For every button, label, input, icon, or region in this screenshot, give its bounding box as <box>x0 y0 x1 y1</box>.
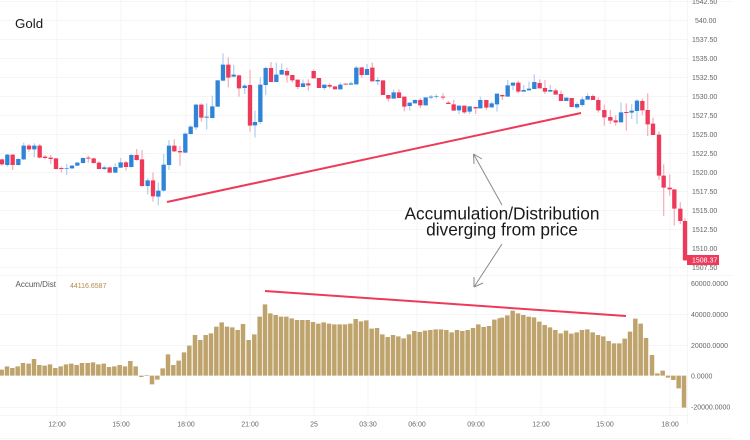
price axis labels: 1510.00 <box>692 246 717 253</box>
price axis labels: 540.00 <box>695 18 717 25</box>
indicator axis labels: 60000.0000 <box>691 281 728 288</box>
annotation text <box>405 204 599 240</box>
arrow: to indicator trend <box>474 244 502 287</box>
indicator axis labels: 40000.0000 <box>691 312 728 319</box>
price axis labels: 1522.50 <box>692 151 717 158</box>
indicator axis labels: 20000.0000 <box>691 343 728 350</box>
time axis labels: 15:00 <box>112 422 130 428</box>
price axis labels: 1527.50 <box>692 113 717 120</box>
price axis labels <box>692 0 717 272</box>
price axis labels: 1517.50 <box>692 189 717 196</box>
indicator trend line <box>265 291 626 316</box>
indicator label: 44116.6587 <box>70 283 107 290</box>
time axis labels: 15:00 <box>596 422 614 428</box>
indicator axis labels <box>691 281 730 412</box>
time axis labels: 06:00 <box>408 422 426 428</box>
time axis labels: 25 <box>310 422 318 428</box>
price axis labels: 1515.00 <box>692 208 717 215</box>
time axis labels: 12:00 <box>48 422 66 428</box>
time axis labels: 09:00 <box>467 422 485 428</box>
annotation text: Accumulation/Distribution <box>405 204 599 224</box>
indicator axis labels: 0.0000 <box>691 374 713 380</box>
indicator label: Accum/Dist <box>16 280 57 289</box>
indicator axis labels: -20000.0000 <box>691 404 730 412</box>
current price tag <box>687 255 719 265</box>
time axis labels: 18:00 <box>177 422 195 428</box>
time axis labels: 12:00 <box>532 422 550 428</box>
price axis labels: 1507.50 <box>692 265 717 272</box>
indicator label <box>16 280 107 290</box>
price axis labels: 1530.00 <box>692 94 717 101</box>
candlestick chart <box>2 53 685 261</box>
price axis labels: 1535.00 <box>692 56 717 63</box>
title: Gold <box>15 16 43 31</box>
time axis labels: 18:00 <box>661 422 679 428</box>
price axis labels: 1512.50 <box>692 227 717 234</box>
annotation text: diverging from price <box>426 220 578 240</box>
price axis labels: 1525.00 <box>692 132 717 139</box>
time axis labels: 21:00 <box>241 422 259 428</box>
arrow: to price trend <box>474 154 502 205</box>
current price tag: 1508.37 <box>692 258 717 265</box>
price axis labels: 1532.50 <box>692 75 717 82</box>
time axis labels <box>48 422 679 428</box>
price trend line <box>167 113 581 202</box>
price axis labels: 1537.50 <box>692 37 717 44</box>
price axis labels: 1520.00 <box>692 170 717 177</box>
time axis labels: 03:30 <box>359 422 377 428</box>
accumulation/distribution bar chart <box>2 304 684 408</box>
